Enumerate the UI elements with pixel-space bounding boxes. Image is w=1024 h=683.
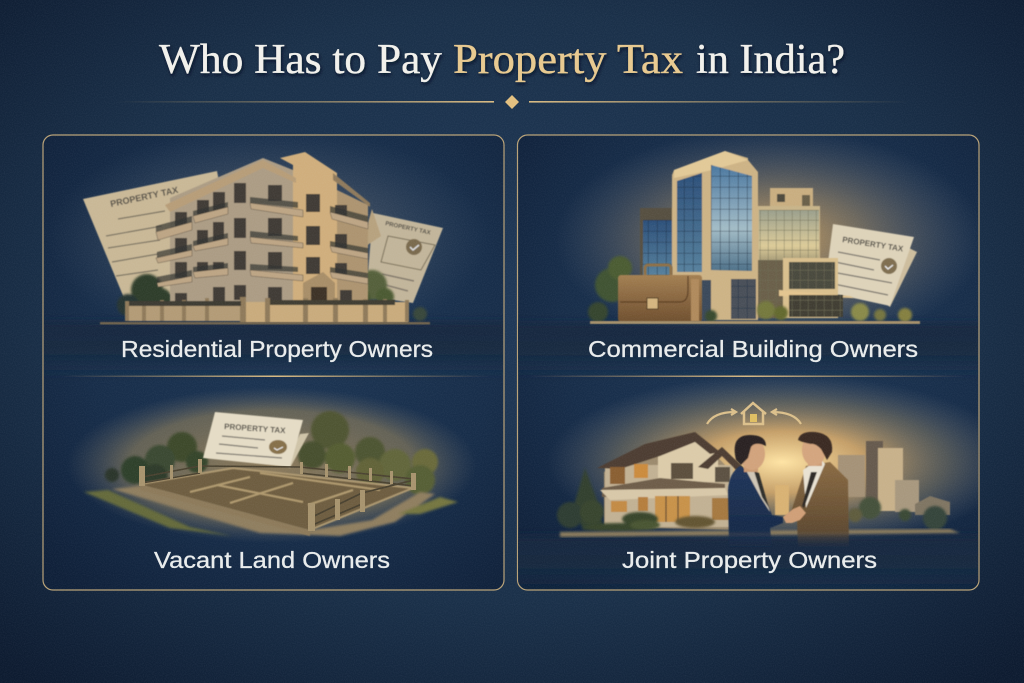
title: Property Tax xyxy=(453,37,683,83)
icon: apartment building xyxy=(125,152,409,323)
icon: house with arrows xyxy=(707,403,801,424)
glow behind residential building xyxy=(82,144,454,294)
label: vacant: Vacant Land Owners xyxy=(154,547,390,573)
panel: vacant land owners xyxy=(67,387,477,573)
icon: tax document xyxy=(203,412,309,468)
icon: left tax document: PROPERTY TAX xyxy=(109,185,179,209)
title: in India? xyxy=(696,37,845,83)
figure: handshake xyxy=(783,506,806,523)
label: joint: Joint Property Owners xyxy=(622,547,877,573)
icon: office buildings xyxy=(640,151,854,320)
divider: left xyxy=(60,376,490,377)
title divider with diamond xyxy=(115,95,910,109)
tower xyxy=(672,151,758,320)
title: Who Has to Pay xyxy=(159,37,442,83)
balconies xyxy=(156,203,368,287)
panel: left card xyxy=(43,135,504,590)
icon: tax document: PROPERTY TAX xyxy=(224,422,286,435)
lower wing xyxy=(783,258,838,318)
glow behind vacant land xyxy=(67,387,477,543)
icon: trees and shrubs xyxy=(557,468,947,530)
windows xyxy=(175,183,352,305)
icon: plot of land xyxy=(140,468,413,536)
glow behind handshake xyxy=(560,379,978,538)
divider: right xyxy=(528,376,966,377)
icon: right tax document xyxy=(360,209,443,303)
icon: tax document: PROPERTY TAX xyxy=(842,235,904,254)
mid block xyxy=(770,188,814,206)
ground xyxy=(560,529,960,537)
label: commercial: Commercial Building Owners xyxy=(588,336,918,362)
panel: commercial building owners xyxy=(518,137,978,372)
label: residential: Residential Property Owners xyxy=(121,336,433,362)
ground line xyxy=(590,321,920,324)
fence xyxy=(126,305,244,321)
icon: grass and path xyxy=(84,486,458,536)
icon: shrubs xyxy=(705,301,912,322)
panel: residential property owners xyxy=(74,144,503,363)
ground line xyxy=(100,322,430,324)
icon: right tax document: PROPERTY TAX xyxy=(385,221,431,237)
shade below commercial ground xyxy=(495,323,1005,376)
panel: joint property owners xyxy=(518,379,978,586)
icon: briefcase xyxy=(618,265,702,322)
icon: suburban house xyxy=(597,432,744,530)
icon: hedges xyxy=(585,512,715,531)
shade below residential ground xyxy=(74,324,503,363)
figure: left man xyxy=(728,435,783,547)
icon: tree xyxy=(588,256,632,322)
glow behind commercial buildings xyxy=(572,137,969,326)
icon: trees beside building xyxy=(117,270,427,321)
panel: right card xyxy=(518,135,979,590)
icon: tax document xyxy=(826,224,917,307)
title xyxy=(159,37,845,83)
figure: right man xyxy=(790,432,849,547)
icon: wooden fence xyxy=(139,459,416,531)
shade below joint ground xyxy=(518,532,878,586)
icon: city skyline xyxy=(775,441,950,515)
icon: left tax document xyxy=(82,170,219,297)
icon: trees around land xyxy=(105,411,438,495)
